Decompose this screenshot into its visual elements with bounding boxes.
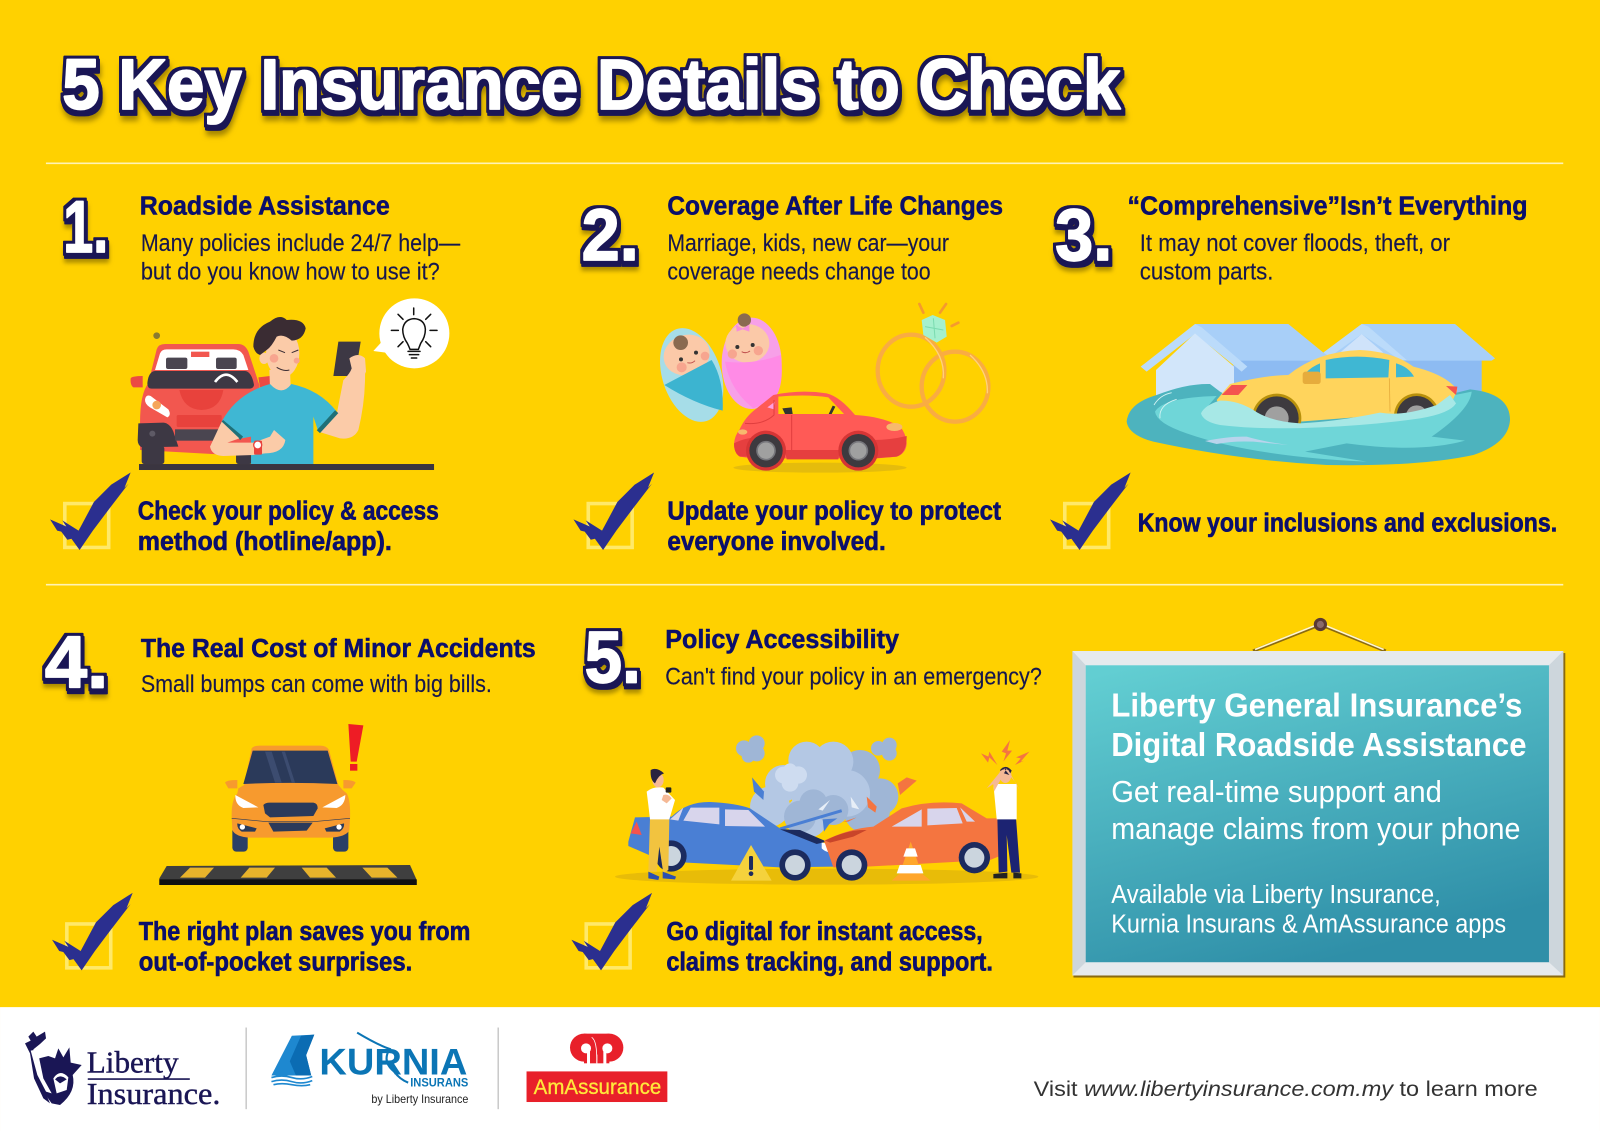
panel: item 5 policy accessibility: [585, 616, 1042, 885]
illustration: man with phone and red car: [131, 298, 449, 470]
woman with phone: [647, 769, 676, 880]
body 1: Many policies include 24/7 help—: [141, 230, 460, 257]
checkbox 3: [1050, 472, 1131, 550]
takeaway 1: Check your policy & access: [138, 495, 439, 525]
man: [318, 370, 365, 439]
body 3: custom parts.: [1140, 259, 1273, 286]
number 2: 2.: [582, 193, 639, 276]
red car: [733, 392, 907, 473]
takeaway 5: [666, 916, 993, 976]
illustration: car crash: [615, 735, 1038, 885]
panel: item 1 roadside assistance: [63, 185, 460, 470]
sign text: Get real-time support and: [1111, 775, 1442, 809]
takeaway 4: out-of-pocket surprises.: [139, 946, 412, 976]
heading 4: The Real Cost of Minor Accidents: [141, 633, 536, 663]
takeaway 2: everyone involved.: [667, 526, 886, 556]
panel: item 2 coverage after life changes: [582, 190, 1003, 473]
number 5: 5.: [585, 616, 641, 699]
number 3: 3.: [1055, 193, 1112, 276]
body 2: Marriage, kids, new car—your: [667, 230, 949, 257]
body 5: Can't find your policy in an emergency?: [665, 664, 1042, 691]
heading 5: Policy Accessibility: [665, 624, 899, 654]
takeaway 1: [138, 495, 439, 556]
warning triangle: [731, 845, 772, 881]
body 3: [1140, 230, 1450, 286]
logo: AmAssurance: [527, 1034, 667, 1102]
panel: item 3 comprehensive: [1055, 190, 1528, 465]
takeaway 2: Update your policy to protect: [667, 495, 1001, 525]
body 2: coverage needs change too: [667, 259, 931, 286]
sign text: Available via Liberty Insurance,: [1111, 881, 1441, 909]
am mark: [570, 1034, 623, 1064]
takeaway 3: Know your inclusions and exclusions.: [1138, 508, 1557, 538]
logo: Liberty Insurance: Liberty: [87, 1045, 179, 1079]
checkbox 1: [50, 472, 131, 550]
website call to action: Visit www.libertyinsurance.com.my to learn more: [1034, 1077, 1538, 1101]
logo: AmAssurance: AmAssurance: [534, 1076, 661, 1099]
statue of liberty mark: [25, 1032, 82, 1105]
flood water: [1127, 384, 1510, 465]
sign text: [1111, 687, 1527, 939]
orange car: [824, 802, 998, 881]
number 4: 4.: [45, 621, 108, 704]
body 2: [667, 230, 949, 286]
heading 1: Roadside Assistance: [140, 190, 390, 220]
sign hanger: [1253, 618, 1386, 651]
takeaway 4: [139, 916, 470, 976]
takeaway 1: method (hotline/app).: [138, 526, 392, 556]
checkbox 5: [571, 893, 652, 970]
heading 3: “Comprehensive”Isn’t Everything: [1128, 190, 1528, 220]
title: 5 Key Insurance Details to Check: [62, 45, 1121, 125]
houses: [1141, 324, 1495, 397]
checkbox 2: [573, 472, 654, 550]
takeaway 4: The right plan saves you from: [139, 916, 470, 946]
sign frame: [1072, 651, 1565, 978]
blue car: [628, 802, 842, 881]
speed bump: [159, 865, 417, 885]
speech bubble with bulb: [373, 340, 392, 353]
footer band: [0, 1007, 1600, 1131]
body 3: It may not cover floods, theft, or: [1140, 230, 1450, 257]
sign text: Kurnia Insurans & AmAssurance apps: [1111, 911, 1506, 939]
takeaway 2: [667, 495, 1001, 556]
body 1: [141, 230, 460, 286]
takeaway 5: Go digital for instant access,: [666, 916, 983, 946]
water overlay: [1154, 392, 1472, 462]
traffic cone: [892, 842, 931, 881]
number 1: 1.: [63, 185, 108, 268]
exclamation mark: [348, 724, 363, 771]
panel: item 4 minor accidents: [45, 621, 536, 885]
sign text: Digital Roadside Assistance: [1111, 727, 1527, 764]
baby in blue: [649, 320, 735, 430]
illustration: flooded car and houses: [1127, 324, 1510, 465]
smoke: [736, 735, 898, 838]
wedding rings: [878, 304, 988, 422]
sign text: manage claims from your phone: [1111, 812, 1520, 846]
logo: Kurnia Insurans: [271, 1033, 468, 1106]
logo: Kurnia Insurans: by Liberty Insurance: [371, 1093, 468, 1106]
logo: Liberty Insurance: Insurance.: [87, 1077, 220, 1111]
logo: Liberty Insurance: [25, 1032, 220, 1111]
takeaway 5: claims tracking, and support.: [666, 946, 993, 976]
logo: Kurnia Insurans: KURNIA: [319, 1041, 467, 1082]
callout: hanging sign: [1072, 618, 1565, 978]
yellow car: [1217, 350, 1457, 443]
illustration: babies, car and rings: [649, 304, 988, 473]
baby in pink: [722, 313, 782, 409]
logo: Kurnia Insurans: INSURANS: [410, 1076, 468, 1090]
checkbox 4: [52, 893, 133, 970]
body 1: but do you know how to use it?: [141, 259, 440, 286]
sign text: Liberty General Insurance’s: [1111, 687, 1522, 724]
heading 2: Coverage After Life Changes: [667, 190, 1003, 220]
body 4: Small bumps can come with big bills.: [141, 671, 492, 698]
illustration: orange car and speed bump: [159, 724, 417, 885]
man holding head: [981, 740, 1029, 878]
